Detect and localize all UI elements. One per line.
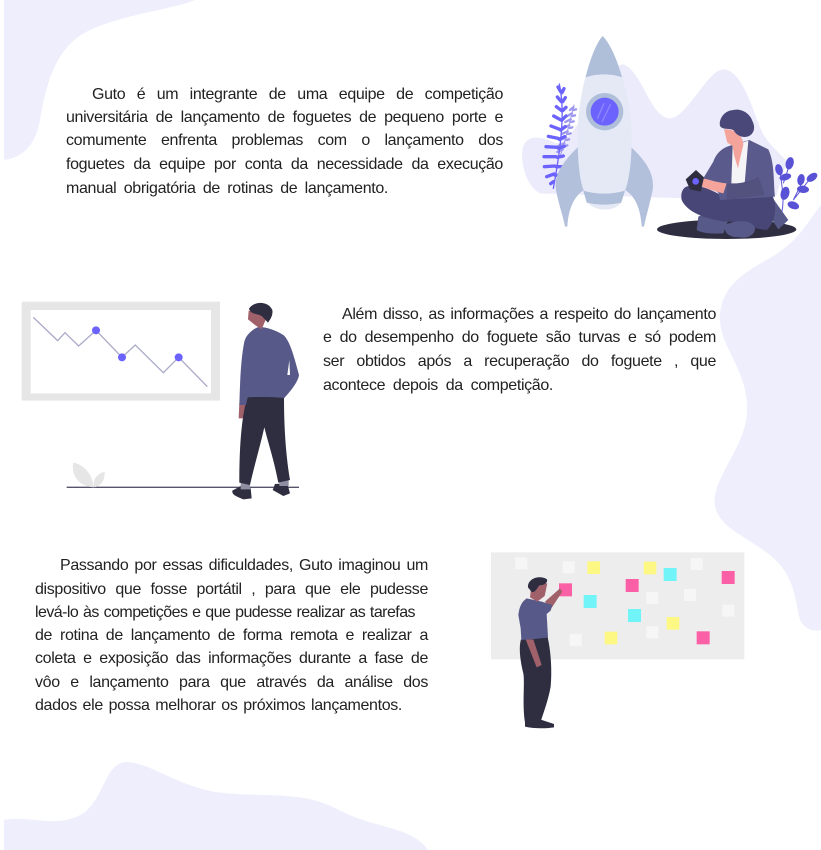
illustration: man placing sticky notes on board xyxy=(491,552,744,728)
text block: information problem: Além disso, as informações a respeito do lançamento xyxy=(342,306,716,322)
text block: introduction: universitária de lançamento de foguetes de pequeno porte e xyxy=(66,108,503,126)
chart line xyxy=(33,317,207,387)
sweater xyxy=(239,327,299,405)
text block: introduction: manual obrigatória de rotinas de lançamento. xyxy=(66,180,388,196)
illustration: rocket and seated person xyxy=(522,36,819,239)
text block: information problem xyxy=(323,306,716,394)
face xyxy=(248,311,268,329)
arm xyxy=(545,588,562,609)
sticky notes: white xyxy=(515,557,734,646)
jacket xyxy=(701,140,775,200)
face xyxy=(530,583,547,602)
rocket band xyxy=(583,191,625,205)
sticky notes: yellow xyxy=(587,561,679,644)
text block: device idea: de rotina de lançamento de forma remota e realizar a xyxy=(35,626,428,644)
chart frame xyxy=(22,302,220,401)
standing man xyxy=(232,303,299,499)
shoes xyxy=(232,483,290,499)
text block: device idea: dados ele possa melhorar os próximos lançamentos. xyxy=(35,696,402,714)
crossed legs xyxy=(681,186,775,230)
rear plant xyxy=(557,105,576,157)
sticky notes: cyan xyxy=(584,568,677,622)
chart points xyxy=(92,326,183,361)
text block: device idea: dispositivo que fosse portátil , para que ele pudesse xyxy=(35,580,428,598)
text block: introduction: Guto é um integrante de uma equipe de competição xyxy=(92,86,503,102)
background blob: top left xyxy=(4,0,195,160)
illustration backdrop xyxy=(522,65,787,198)
text block: device idea: Passando por essas dificuldades, Guto imaginou um xyxy=(60,556,428,574)
ground line xyxy=(67,485,299,489)
trousers xyxy=(520,637,551,723)
right plant xyxy=(778,168,812,222)
text block: device idea: levá-lo às competições e que pudesse realizar as tarefas xyxy=(35,604,415,620)
arm gap xyxy=(287,360,290,375)
board xyxy=(491,552,744,659)
rocket body xyxy=(578,36,632,210)
hand and forearm xyxy=(526,639,542,667)
shirt xyxy=(518,598,552,640)
hand xyxy=(239,403,246,418)
front plant xyxy=(544,84,566,188)
trousers xyxy=(239,397,290,485)
seated person xyxy=(681,110,788,238)
rocket nose xyxy=(586,36,622,77)
front foot xyxy=(725,221,755,238)
text block: introduction: foguetes da equipe por conta da necessidade da execução xyxy=(66,156,503,172)
back knee xyxy=(697,214,728,234)
hair xyxy=(249,303,272,323)
text block: information problem: ser obtidos após a recuperação do foguete , que xyxy=(323,352,716,370)
text block: information problem: acontece depois da competição. xyxy=(323,376,553,394)
rocket window xyxy=(586,93,623,130)
background blob: bottom xyxy=(4,762,428,850)
hair xyxy=(720,110,754,137)
man at board xyxy=(518,577,562,728)
text block: device idea: vôo e lançamento para que através da análise dos xyxy=(35,674,428,690)
hair xyxy=(528,577,547,592)
rocket fins xyxy=(556,147,584,227)
floor hole xyxy=(657,220,796,239)
sticky notes: pink xyxy=(559,571,735,644)
text block: introduction: comumente enfrenta problemas com o lançamento dos xyxy=(66,132,503,148)
skin xyxy=(724,129,743,168)
text block: device idea: coleta e exposição das informações durante a fase de xyxy=(35,650,428,666)
jacket back tail xyxy=(770,197,788,229)
shoes xyxy=(525,719,554,728)
icon: leaves xyxy=(73,463,105,487)
shirt xyxy=(731,141,748,183)
background blob: right xyxy=(715,205,821,631)
text block: introduction xyxy=(66,86,503,196)
text block: information problem: e do desempenho do foguete são turvas e só podem xyxy=(323,328,716,346)
text block: device idea xyxy=(35,556,428,714)
tablet xyxy=(686,170,704,192)
jacket sleeve xyxy=(727,177,765,200)
illustration: man viewing line chart xyxy=(22,302,299,499)
